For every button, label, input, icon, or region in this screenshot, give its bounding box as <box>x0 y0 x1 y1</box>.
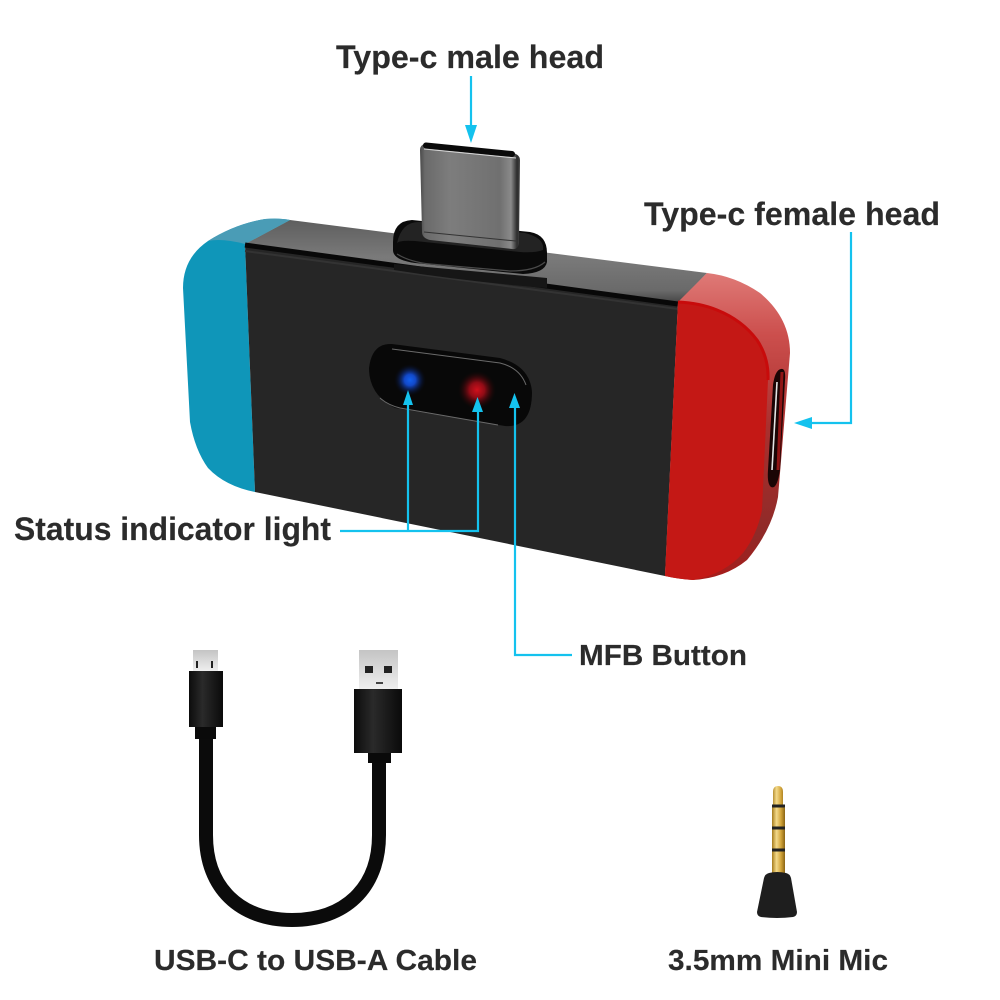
icon: red LED <box>458 371 496 409</box>
black front face <box>245 244 678 576</box>
device: adapter body <box>183 143 790 580</box>
body top face <box>245 220 707 303</box>
USB-A connector <box>354 650 402 763</box>
icon: mini mic <box>757 786 797 918</box>
indicator window <box>369 344 532 426</box>
arrow: to Type-c female head <box>794 232 851 429</box>
label: USB-C to USB-A Cable: USB-C to USB-A Cable <box>154 945 477 977</box>
micro connector <box>189 650 223 739</box>
connector collar <box>393 220 547 274</box>
shadow beneath collar <box>394 264 547 288</box>
label: Status indicator light: Status indicator light <box>14 511 331 547</box>
red end cap <box>665 273 790 580</box>
arrow: to Type-c male head <box>465 76 477 143</box>
connector: Type-c male plug <box>420 143 520 249</box>
title: Type-c male head: Type-c male head <box>336 39 604 75</box>
port: Type-c female <box>768 369 785 487</box>
icon: blue LED <box>394 364 426 396</box>
label: MFB Button: MFB Button <box>579 640 747 672</box>
blue end cap <box>183 219 290 492</box>
arrow: to MFB button <box>509 393 572 655</box>
icon: USB cable <box>189 650 402 920</box>
arrows: to status indicator lights <box>340 390 483 531</box>
label: 3.5mm Mini Mic: 3.5mm Mini Mic <box>668 945 888 977</box>
label: Type-c female head: Type-c female head <box>644 196 940 232</box>
